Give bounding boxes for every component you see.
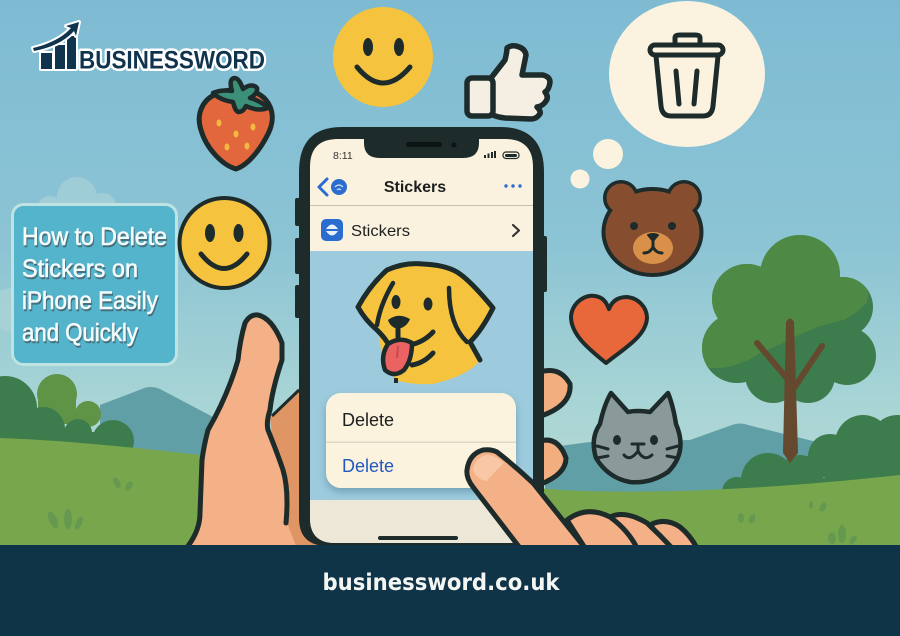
list row icon xyxy=(321,219,343,241)
menu item: delete: Delete xyxy=(342,410,394,430)
title text: and Quickly xyxy=(22,319,138,347)
tree xyxy=(702,235,876,463)
header divider xyxy=(310,205,533,206)
delete menu xyxy=(326,393,516,488)
tapping hand with fingers xyxy=(467,450,697,548)
mountains xyxy=(100,387,830,500)
title text: How to Delete xyxy=(22,223,167,251)
back hand fingers xyxy=(540,370,570,484)
curled fingers xyxy=(567,512,697,548)
lower tray xyxy=(310,500,533,543)
sticker area xyxy=(310,251,533,500)
fingernail highlight xyxy=(473,455,504,481)
logo: businessword xyxy=(33,22,265,74)
icon: trash can xyxy=(650,35,723,116)
nav back icon xyxy=(319,179,347,195)
sticker: thumbs up xyxy=(467,46,550,119)
sticker: strawberry xyxy=(199,78,272,169)
left bushes xyxy=(0,374,134,462)
clouds xyxy=(0,177,116,336)
phone body xyxy=(299,127,544,546)
bubble circles xyxy=(570,1,765,188)
pointing finger xyxy=(467,450,585,548)
holding hand and thumb xyxy=(188,315,296,546)
speaker and camera xyxy=(406,142,456,148)
thought bubble with trash icon xyxy=(570,1,765,188)
menu item: delete blue: Delete xyxy=(342,456,394,476)
nav more dots xyxy=(504,184,522,188)
sticker: heart xyxy=(571,296,647,363)
footer url: businessword.co.uk xyxy=(322,570,560,596)
title text: Stickers on xyxy=(22,255,138,283)
list row label: Stickers xyxy=(351,223,410,240)
side buttons xyxy=(295,198,547,318)
sticker: outlined smiley xyxy=(180,198,270,288)
phone xyxy=(295,127,547,546)
grass meadow xyxy=(0,438,900,546)
home indicator xyxy=(378,536,458,540)
palm behind phone xyxy=(270,388,340,546)
footer bar xyxy=(0,545,900,636)
status time: 8:11 xyxy=(333,150,353,162)
sticker: yellow smiley xyxy=(333,7,433,107)
status icons xyxy=(484,151,519,158)
title text: iPhone Easily xyxy=(22,287,158,315)
right bushes xyxy=(722,415,900,507)
notch xyxy=(364,136,479,158)
title panel xyxy=(12,204,176,364)
logo wordmark: BUSINESSWORD xyxy=(79,46,265,74)
title text xyxy=(22,223,167,347)
list row chevron xyxy=(513,225,519,236)
sticker: dog xyxy=(358,264,493,384)
nav title: Stickers xyxy=(384,179,446,196)
logo icon: rising bars and arrow xyxy=(33,22,79,69)
sticker: bear xyxy=(604,182,702,275)
screen xyxy=(310,139,533,543)
sticker: cat xyxy=(594,393,680,482)
